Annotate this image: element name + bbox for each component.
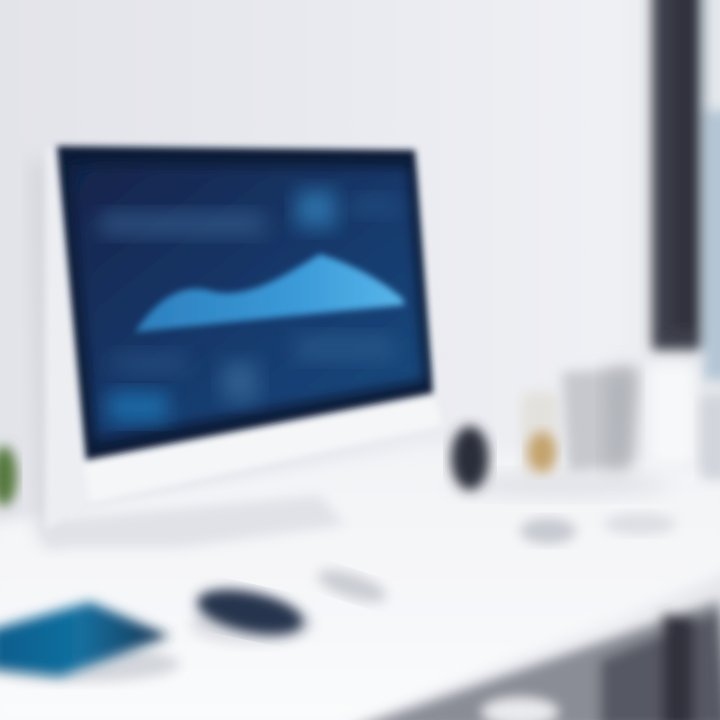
monitor chin bbox=[84, 398, 442, 502]
lower data blocks bbox=[112, 352, 187, 374]
monitor screen bbox=[57, 146, 433, 460]
phone bbox=[190, 581, 314, 644]
plant leaf bbox=[0, 446, 17, 506]
highlight top right bbox=[296, 190, 336, 228]
grey cup bbox=[562, 368, 636, 472]
monitor side shadow bbox=[30, 160, 60, 540]
object shadows bbox=[450, 473, 670, 497]
desk objects right bbox=[450, 365, 720, 497]
desk surface bbox=[0, 445, 720, 720]
white item bbox=[650, 365, 695, 465]
bottle bbox=[522, 392, 558, 476]
tablet bbox=[0, 602, 180, 682]
monitor bbox=[30, 146, 442, 548]
small pad bbox=[604, 513, 676, 535]
mouse bbox=[314, 563, 390, 609]
desk underside and drawers bbox=[350, 600, 720, 720]
area chart bbox=[135, 254, 405, 332]
dark speaker bbox=[451, 426, 489, 490]
small desk items bbox=[314, 513, 676, 609]
text block top left bbox=[100, 212, 265, 236]
monitor bezel bbox=[45, 146, 442, 530]
window frame bbox=[652, 0, 720, 380]
screen chart and data blocks bbox=[100, 190, 405, 422]
small remote bbox=[520, 518, 576, 544]
monitor stand base bbox=[45, 495, 345, 548]
